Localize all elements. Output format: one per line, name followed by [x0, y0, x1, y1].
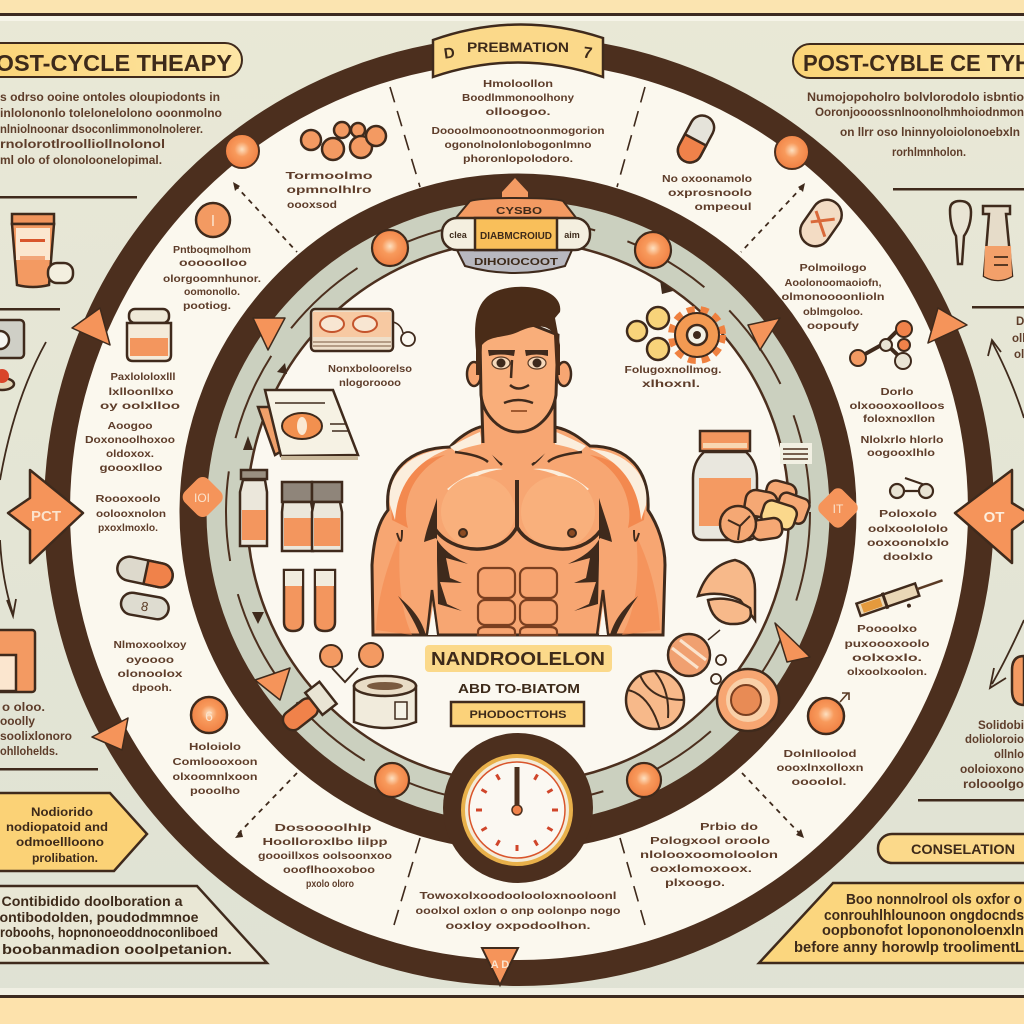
centre subtitle: ABD TO-BIATOM	[458, 681, 580, 696]
star: OT	[955, 470, 1024, 563]
icon: pile of pills	[720, 478, 811, 542]
callout: left pentagon: nodiopatoid and	[6, 820, 108, 834]
text: right disc block 3: oolxoolololo	[868, 523, 948, 535]
text: jar caption: Paxlololoxlll	[110, 371, 176, 383]
text: right disc block 2: oogooxlhlo	[867, 447, 935, 459]
flag note on band	[780, 443, 812, 464]
text: pill caption: Aoolonoomaoiofn,	[784, 277, 882, 289]
text: bottom centre: ooolxol oxlon o onp oolonpo nogo	[416, 905, 620, 917]
text: right lower	[960, 720, 1024, 791]
text: left disc block 4: olonoolox	[118, 668, 183, 680]
text: left disc block 3	[96, 493, 166, 534]
neck	[481, 395, 555, 462]
text: gear caption: Folugoxnollmog.	[624, 364, 722, 376]
text: left disc block 4	[114, 639, 187, 694]
text: right lower: Solidobi	[978, 720, 1024, 732]
rule right 3	[918, 799, 1024, 802]
text: top left intro	[0, 92, 222, 167]
text: pill caption: olmonoooonlioln	[782, 291, 884, 303]
icon: big orb on band	[717, 669, 779, 731]
icon: molecule right	[850, 321, 912, 369]
text: top left intro: nlniolnoonar dsoconlimmonolnolerer.	[0, 124, 203, 136]
text: lower-left orb caption	[172, 741, 258, 797]
text: left disc block 3: oolooxnolon	[96, 508, 166, 520]
band arrows	[253, 318, 810, 700]
face	[480, 320, 558, 432]
callout: left pentagon: Nodiorido	[31, 805, 93, 819]
callout: left bottom trapezoid: boobanmadion ooolpetanion.	[2, 941, 232, 957]
text: right lower: rolooolgo	[963, 779, 1024, 791]
callout: left pentagon	[0, 793, 147, 871]
text: balls caption: opmnolhlro	[286, 184, 372, 196]
orb: top right of outer ring	[775, 135, 809, 169]
icon: jar	[127, 309, 171, 361]
text: right disc block 1	[850, 386, 945, 425]
centre title: NANDROOLELON	[431, 649, 605, 669]
text: top right intro: Numojopoholro bolvlorodolo isbntio	[807, 92, 1024, 104]
nose and mouth	[504, 360, 533, 411]
consultation pill	[878, 834, 1024, 863]
text: pill caption: oblmgoloo.	[803, 306, 863, 318]
icon: shell shapes	[698, 560, 755, 624]
text: bottom centre: ooxloy oxpodoolhon.	[446, 920, 591, 932]
text: top centre: phoronlopolodoro.	[463, 153, 573, 165]
text: bottom left disc: Hoolloroxlbo lilpp	[262, 836, 388, 848]
icon: spoon and flask	[950, 201, 1012, 280]
text: top centre: olloogoo.	[486, 106, 551, 118]
text: bottom left disc	[258, 822, 392, 890]
icon: tube on band	[277, 682, 337, 737]
rule right 2	[972, 306, 1024, 308]
text: left disc block 4: dpooh.	[132, 682, 172, 694]
text: orb caption	[163, 244, 261, 312]
callout: right bottom trapezoid: before anny horowlp troolimentL	[794, 939, 1024, 956]
text: right disc block 4: oolxoxlo.	[852, 652, 922, 664]
text: jar caption: lxlloonllxo	[108, 386, 174, 398]
text: lower-left orb caption: Comloooxoon	[172, 756, 258, 768]
icon: numbered orb: I	[211, 213, 215, 230]
text: lower-left orb caption: Holoiolo	[189, 741, 241, 753]
text: right edge: ol	[1014, 349, 1024, 361]
band small arrows	[243, 280, 673, 624]
text: right disc block 4: puxoooxoolo	[844, 638, 930, 650]
text: lower right orb caption	[776, 748, 864, 788]
text: top left intro: inlolononlo tolelonelolono ooonmolno	[0, 108, 222, 120]
text: left lower: soolixlonoro	[0, 731, 72, 743]
top capsule label: DIHOIOCOOT	[474, 257, 558, 268]
arrow heads	[233, 182, 805, 838]
text: top right intro: rorhlmnholon.	[892, 147, 966, 159]
icon: oval pill	[794, 194, 848, 252]
eyebrows	[488, 350, 548, 356]
icon: device clipped	[0, 320, 24, 390]
text: balls caption: Tormoolmo	[286, 170, 372, 182]
icon: test tubes	[284, 570, 335, 631]
text: bottom right disc: nlolooxoomoloolon	[640, 849, 778, 861]
icon: gear with balls	[627, 307, 723, 361]
text: left disc block 3: Roooxoolo	[96, 493, 160, 505]
callout: left bottom trapezoid: roboohs, hopnonoeoddnoconliboed	[0, 924, 218, 940]
callout: left bottom trapezoid: Contibidido doolboration a	[2, 893, 183, 909]
text: bottom left disc: oooflhooxoboo	[283, 864, 375, 876]
top capsule label	[442, 178, 590, 273]
text: orb caption: oomonollo.	[184, 286, 240, 298]
text: balls caption: oooxsod	[287, 199, 337, 211]
arrow: left lower curve	[0, 540, 16, 616]
text: bottom right disc: ooxlomoxoox.	[650, 863, 752, 875]
process band	[226, 220, 810, 804]
text: top left intro: rnolorotlroolliollnolonol	[0, 139, 165, 151]
lat shadows	[398, 498, 638, 635]
text: bottom centre	[416, 890, 620, 932]
diamond: left	[179, 474, 226, 520]
divider dashes	[390, 87, 645, 925]
icon: bottle clipped right	[1012, 656, 1024, 705]
centre label box: PHODOCTTOHS	[470, 709, 566, 721]
star: PCT: PCT	[31, 508, 61, 525]
text: tray caption	[328, 363, 412, 389]
text: left disc block 3: pxoxlmoxlo.	[98, 522, 158, 534]
dashed arrows	[235, 185, 803, 836]
top banner: 7	[582, 45, 593, 63]
text: right lower: ollnlo	[994, 749, 1024, 761]
icon: numbered orb	[196, 203, 230, 237]
text: right disc block 3: ooxoonolxlo	[867, 537, 949, 549]
rule left 2	[0, 308, 60, 310]
text: left disc block 2: Doxonoolhoxoo	[85, 434, 175, 446]
text: top centre: ogonolnolonlobogonlmno	[444, 139, 592, 151]
pectorals	[441, 476, 595, 548]
text: top right intro: on llrr oso lninnyoloiolonoebxln	[840, 127, 1020, 139]
text: top right intro: Ooronjoooossnlnoonolhmhoiodnmon	[815, 107, 1024, 119]
arm gaps	[428, 606, 437, 635]
text: left disc block 2	[85, 420, 175, 474]
bottom strip	[0, 988, 1024, 1024]
text: right disc block 3: Poloxolo	[879, 508, 937, 520]
rule right 1	[893, 188, 1024, 190]
callout: left bottom trapezoid: ontibodolden, poudodmmnoe	[0, 909, 199, 925]
centre title	[425, 645, 612, 672]
text: right disc block 4: olxoolxoolon.	[847, 666, 927, 678]
top strip	[0, 0, 1024, 21]
top capsule label: aim	[564, 230, 580, 240]
text: tray caption: nlogoroooo	[339, 377, 401, 389]
text: top centre: Doooolmoonootnoonmogorion	[432, 125, 604, 137]
icon: tray with tablets	[311, 309, 415, 351]
text: top right intro	[807, 92, 1024, 159]
text: top centre	[432, 78, 604, 165]
icon: document	[258, 390, 358, 460]
orb: top left of outer ring	[225, 134, 259, 168]
text: balls caption	[286, 170, 372, 211]
man figure	[372, 287, 665, 635]
pale shoulder highlights	[390, 432, 646, 520]
text: right lower: dolioloroio	[965, 734, 1024, 746]
consultation pill: CONSELATION	[911, 841, 1015, 857]
icon: capsule	[674, 111, 718, 167]
text: gear caption	[624, 364, 722, 390]
text: orb caption: olorgoomnhunor.	[163, 273, 261, 285]
callout: left pentagon: odmoellloono	[16, 835, 104, 849]
text: bottom left disc: goooillxos oolsoonxoo	[258, 850, 392, 862]
arrow: bottom A D	[482, 948, 518, 985]
text: capsule caption: oxprosnoolo	[668, 187, 752, 199]
text: left lower: ohllohelds.	[0, 746, 58, 758]
text: capsule caption	[662, 173, 752, 213]
nipples	[459, 529, 576, 537]
arrow: bottom A D: A D	[491, 959, 509, 971]
text: top left intro: s odrso ooine ontoles oloupiodonts in	[0, 92, 220, 104]
top banner: D	[443, 44, 456, 63]
text: orb caption: Pntboqmolhom	[173, 244, 251, 256]
top capsule label: CYSBO	[496, 206, 542, 217]
top banner	[433, 24, 603, 77]
text: right disc block 2: Nlolxrlo hlorlo	[860, 434, 944, 446]
text: pill caption: oopoufy	[807, 320, 859, 332]
arrow: right lower curve	[990, 620, 1024, 688]
text: lower right orb caption: Dolnlloolod	[784, 748, 856, 760]
rule left 1	[0, 196, 137, 198]
text: gear caption: xlhoxnl.	[642, 378, 700, 390]
text: left disc block 2: oldoxox.	[106, 448, 154, 460]
text: bottom left disc: Dosoooolhlp	[274, 822, 372, 834]
text: right lower: ooloioxono	[960, 764, 1024, 776]
icon: vials	[240, 470, 342, 551]
callout: left pentagon: prolibation.	[32, 851, 98, 865]
text: right disc block 4: Poooolxo	[857, 623, 917, 635]
text: right disc block 1: olxoooxoolloos	[850, 400, 945, 412]
text: right disc block 2	[860, 434, 944, 459]
hair	[475, 287, 560, 375]
text: pill caption: Polmoilogo	[800, 262, 866, 274]
text: top centre: Boodlmmonoolhony	[462, 92, 574, 104]
outer ring arrows	[72, 308, 967, 750]
eyes	[492, 357, 546, 369]
rule left 3	[0, 768, 98, 770]
text: bottom right disc: plxoogo.	[665, 877, 725, 889]
text: bottom right disc	[640, 821, 778, 889]
icon: dumbbell molecule	[890, 478, 933, 498]
text: tray caption: Nonxboloorelso	[328, 363, 412, 375]
icon: tape roll	[354, 676, 416, 728]
callout: right bottom trapezoid	[759, 883, 1024, 963]
text: left disc block 4: Nlmoxoolxoy	[114, 639, 187, 651]
top capsule label: clea	[449, 230, 468, 240]
icon: syringe	[856, 573, 947, 624]
icon: orange box clipped	[0, 630, 35, 692]
text: bottom right disc: Pologxool oroolo	[650, 835, 770, 847]
clock	[443, 733, 593, 883]
diamond: right: IT	[833, 502, 844, 516]
text: orb caption: ooooolloo	[179, 257, 247, 269]
icon: cream tube	[12, 214, 73, 287]
pec and chest lines	[397, 438, 639, 635]
text: top left intro: ml olo of olonoloonelopimal.	[0, 155, 162, 167]
text: top centre: Hmoloollon	[483, 78, 553, 90]
arrow: right top curve	[988, 340, 1024, 418]
text: left lower: ooolly	[0, 716, 36, 728]
icon: balls on sticks	[320, 643, 383, 682]
icon: striped balls	[626, 630, 726, 730]
star: PCT	[8, 470, 83, 563]
text: right disc block 1: foloxnoxllon	[863, 413, 935, 425]
text: left lower	[0, 702, 72, 758]
text: left lower: o oloo.	[2, 702, 45, 714]
text: bottom right disc: Prbio do	[700, 821, 758, 833]
text: capsule caption: ompeoul	[694, 201, 752, 213]
icon: two pills	[115, 554, 175, 621]
icon: numbered orb lower left	[191, 697, 227, 733]
arrow: left top curve	[0, 342, 46, 480]
ears	[467, 362, 571, 386]
text: right disc block 1: Dorlo	[880, 386, 914, 398]
text: right edge	[1012, 316, 1024, 361]
text: pill caption	[782, 262, 884, 332]
text: capsule caption: No oxoonamolo	[662, 173, 752, 185]
text: lower right orb caption: oooolol.	[792, 776, 847, 788]
diamond: right	[815, 485, 861, 531]
text: lower-left orb caption: olxoomnlxoon	[172, 771, 258, 783]
text: bottom centre: Towoxolxoodoolooloxnooloonl	[420, 890, 617, 902]
text: right disc block 3: doolxlo	[883, 551, 933, 563]
deltoid highlights	[376, 455, 660, 635]
icon: large jar	[693, 431, 757, 540]
text: right disc block 4	[844, 623, 930, 678]
star: OT: OT	[984, 509, 1004, 526]
diamond: left: IOI	[194, 491, 210, 505]
ring orbs	[372, 230, 671, 797]
inner ring	[193, 187, 843, 837]
abdominals	[478, 568, 557, 635]
text: lower-left orb caption: pooolho	[190, 785, 240, 797]
icon: two pills: 8	[140, 598, 150, 614]
text: jar caption	[100, 371, 180, 412]
centre label box	[451, 702, 584, 726]
top banner: PREBMATION	[467, 40, 569, 55]
callout: left bottom trapezoid	[0, 886, 267, 963]
text: bottom left disc: pxolo oloro	[306, 878, 354, 890]
text: jar caption: oy oolxlloo	[100, 400, 180, 412]
text: lower right orb caption: oooxlnxolloxn	[776, 762, 864, 774]
top capsule label: DIABMCROIUD	[480, 231, 552, 242]
text: left disc block 2: Aoogoo	[108, 420, 152, 432]
text: right disc block 3	[867, 508, 949, 563]
text: orb caption: pootiog.	[183, 300, 231, 312]
torso	[372, 427, 665, 635]
text: left disc block 4: oyoooo	[126, 654, 174, 666]
icon: numbered orb lower left: 6	[205, 708, 213, 724]
icon: orange balls	[301, 122, 386, 160]
text: left disc block 2: goooxlloo	[100, 462, 162, 474]
icon: orb lower right	[808, 693, 849, 734]
